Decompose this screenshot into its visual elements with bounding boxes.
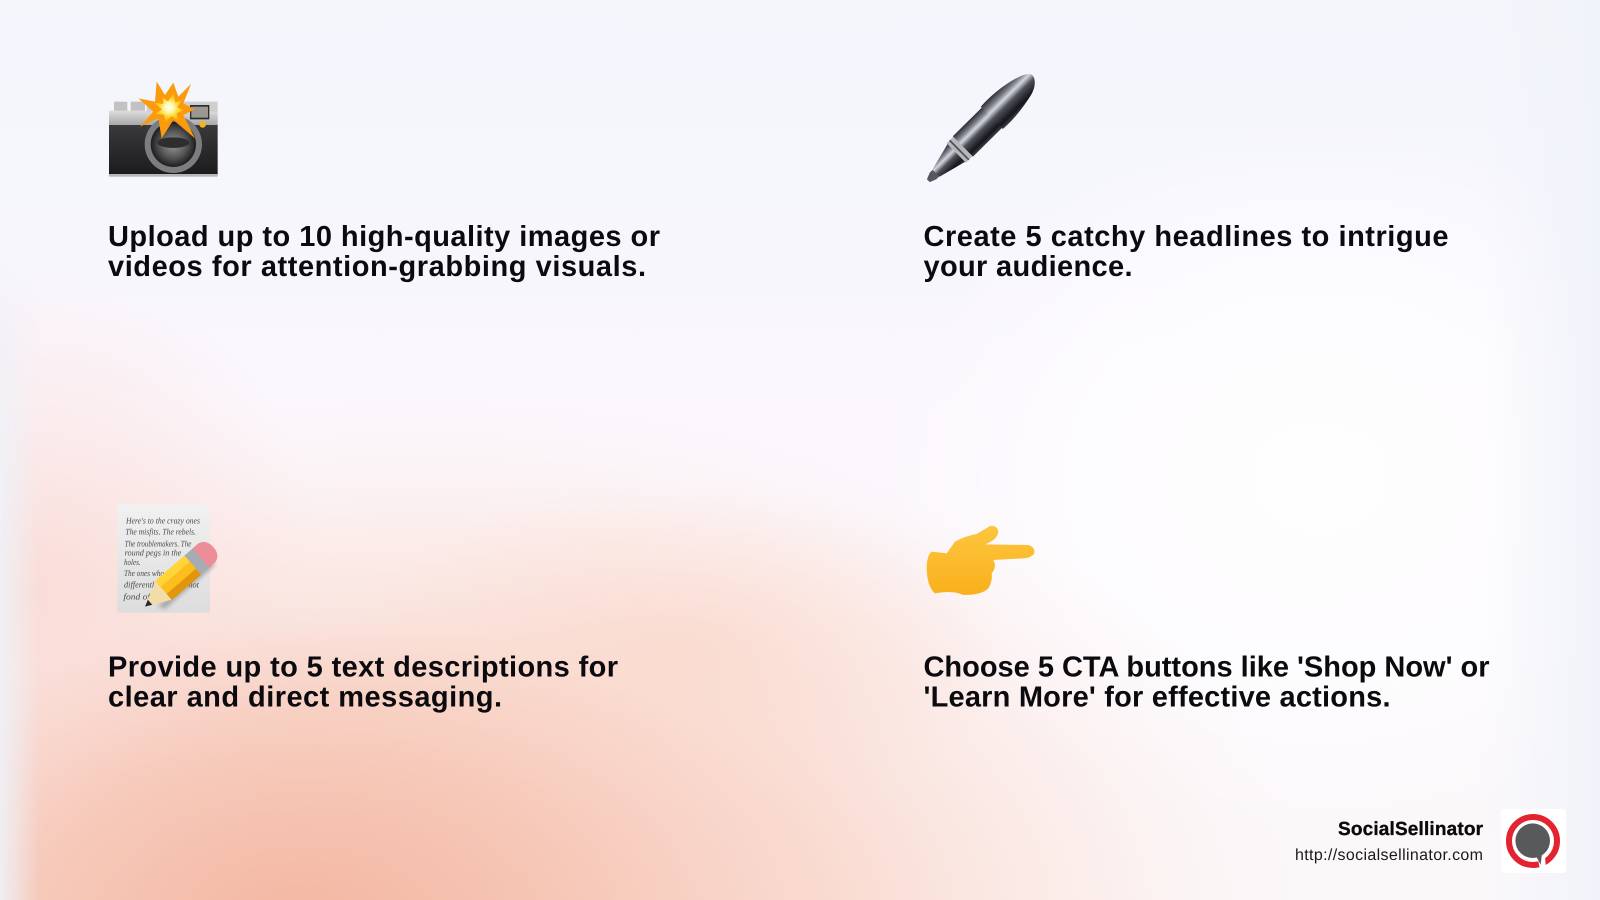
heading: headlines: your audience. — [924, 251, 1132, 283]
logo — [1501, 809, 1566, 873]
icon: pen — [917, 65, 1045, 192]
background gradient — [0, 328, 1208, 900]
icon: memo with pencil — [117, 504, 223, 618]
heading: images: videos for attention-grabbing visuals. — [108, 251, 646, 283]
heading: images: Upload up to 10 high-quality images or — [108, 221, 660, 253]
heading: CTA buttons: 'Learn More' for effective actions. — [924, 681, 1390, 713]
heading: images — [108, 221, 660, 283]
icon: memo with pencil: The ones who — [124, 568, 164, 578]
brand name: SocialSellinator — [1338, 819, 1484, 840]
brand url: http://socialsellinator.com — [1295, 847, 1483, 864]
heading: headlines — [924, 221, 1448, 283]
icon: memo with pencil: holes. — [124, 557, 141, 567]
heading: CTA buttons: Choose 5 CTA buttons like 'Shop Now' or — [924, 651, 1490, 683]
icon: memo with pencil: differently. They're not — [124, 580, 199, 589]
icon: memo with pencil: Here's to the crazy ones — [126, 516, 200, 525]
icon: memo with pencil: The misfits. The rebels. — [125, 527, 196, 537]
icon: memo with pencil: round pegs in the — [125, 548, 181, 558]
icon: memo with pencil: The troublemakers. The — [125, 539, 191, 549]
heading: headlines: Create 5 catchy headlines to intrigue — [924, 221, 1448, 253]
heading: descriptions: Provide up to 5 text descriptions for — [108, 651, 618, 683]
icon: camera with flash — [109, 82, 218, 177]
icon: memo with pencil: fond of — [123, 592, 151, 601]
heading: CTA buttons — [924, 651, 1490, 713]
brand footer — [1295, 809, 1566, 873]
heading: descriptions — [108, 651, 618, 713]
heading: descriptions: clear and direct messaging. — [108, 681, 502, 713]
icon: pointing hand — [927, 526, 1034, 595]
